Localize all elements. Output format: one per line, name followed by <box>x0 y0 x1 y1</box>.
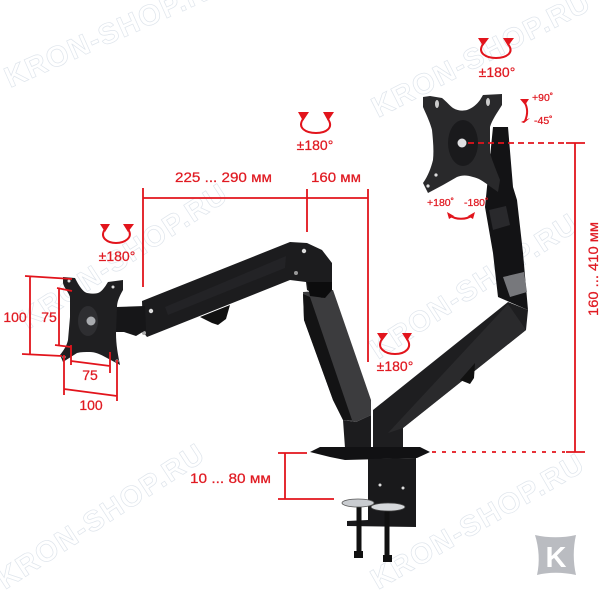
vertical link <box>485 127 528 310</box>
watermarks: KRON-SHOP.RU <box>364 208 584 366</box>
dimension: VESA left: 100 <box>79 397 103 413</box>
dimension: clamp thickness <box>190 453 334 499</box>
rotation: elbow: ±180° <box>297 137 333 153</box>
right VESA plate <box>423 94 502 193</box>
left VESA plate <box>60 277 123 365</box>
rotation: left plate <box>99 224 135 264</box>
dimension: clamp thickness: 10 ... 80 мм <box>190 470 271 486</box>
dimension: VESA left: 75 <box>41 309 57 325</box>
rotation: right plate: ±180° <box>479 64 515 80</box>
left monitor arm assembly <box>116 242 371 448</box>
swivel indicator: +180˚ <box>427 197 454 209</box>
dimension: VESA left <box>3 276 117 413</box>
right monitor arm assembly <box>373 127 528 448</box>
clamp pads <box>342 499 374 507</box>
upper arm <box>142 242 332 337</box>
dimension: VESA left: 100 <box>3 309 27 325</box>
tilt indicator: +90˚ <box>532 92 553 104</box>
clamp body <box>347 458 416 527</box>
rotation: elbow <box>297 112 334 153</box>
arm bracket <box>200 305 230 325</box>
desk clamp <box>310 447 430 562</box>
rotation: right base <box>377 333 413 374</box>
tilt indicator: -45˚ <box>534 115 553 127</box>
swivel indicator: -180˚ <box>464 197 489 209</box>
watermarks: KRON-SHOP.RU <box>366 448 591 596</box>
dimension: arm reach: 160 мм <box>311 169 361 185</box>
swivel joint <box>116 306 146 336</box>
rotation: right plate <box>478 38 515 80</box>
tilt indicator <box>520 92 553 127</box>
rotation: right base: ±180° <box>377 358 413 374</box>
post <box>343 415 371 448</box>
logo: K badge: K <box>546 542 567 574</box>
swivel indicator <box>427 197 489 219</box>
rotation: left plate: ±180° <box>99 248 135 264</box>
long arm <box>373 302 528 448</box>
screws <box>356 505 362 552</box>
base plate <box>310 447 430 460</box>
dimension: arm reach: 225 ... 290 мм <box>175 169 272 185</box>
dimension: height <box>432 143 600 452</box>
logo: K badge <box>535 535 576 575</box>
watermarks: KRON-SHOP.RU <box>14 178 234 336</box>
lower arm <box>303 290 371 422</box>
arm bracket <box>460 363 475 384</box>
dimension: arm reach <box>143 169 368 362</box>
dimension: VESA left: 75 <box>82 367 98 383</box>
